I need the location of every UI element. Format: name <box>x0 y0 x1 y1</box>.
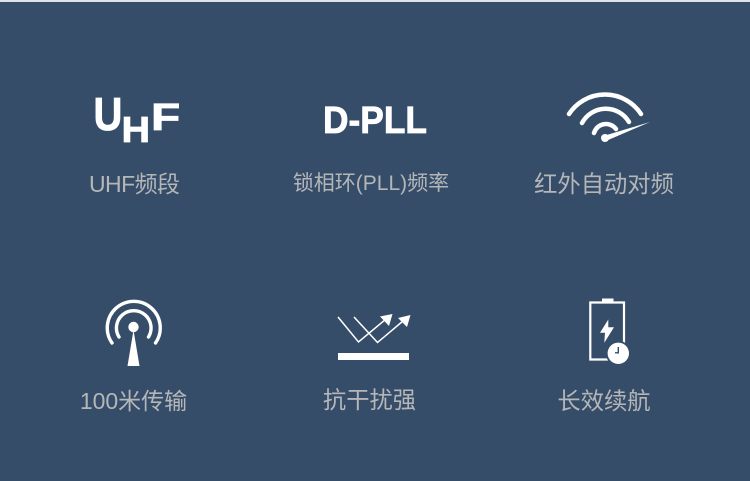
panel: infrared pairing <box>534 95 674 197</box>
label: long battery life: 长效续航 <box>557 388 651 414</box>
panel: 100 m transmission <box>80 301 187 414</box>
label: infrared auto pairing: 红外自动对频 <box>534 171 674 197</box>
icon: reflected arrows <box>338 314 410 360</box>
panel: anti-interference <box>323 314 416 413</box>
icon: UHF logo: U <box>94 89 122 141</box>
panel: UHF band <box>89 89 180 197</box>
panel: long battery life <box>557 298 651 414</box>
icon: D-PLL logo: D-PLL <box>323 100 427 142</box>
icon: UHF logo <box>94 89 180 151</box>
icon: antenna <box>107 301 160 366</box>
icon: UHF logo: F <box>151 97 180 139</box>
icon: wifi with needle <box>569 95 650 142</box>
label: UHF band: UHF频段 <box>89 171 180 197</box>
label: anti-interference: 抗干扰强 <box>323 387 416 413</box>
icon: UHF logo: H <box>122 111 150 151</box>
label: PLL frequency: 锁相环(PLL)频率 <box>293 172 449 195</box>
label: 100 m transmission: 100米传输 <box>80 388 187 414</box>
icon: battery with clock <box>590 298 631 366</box>
panel: D-PLL <box>293 100 449 195</box>
